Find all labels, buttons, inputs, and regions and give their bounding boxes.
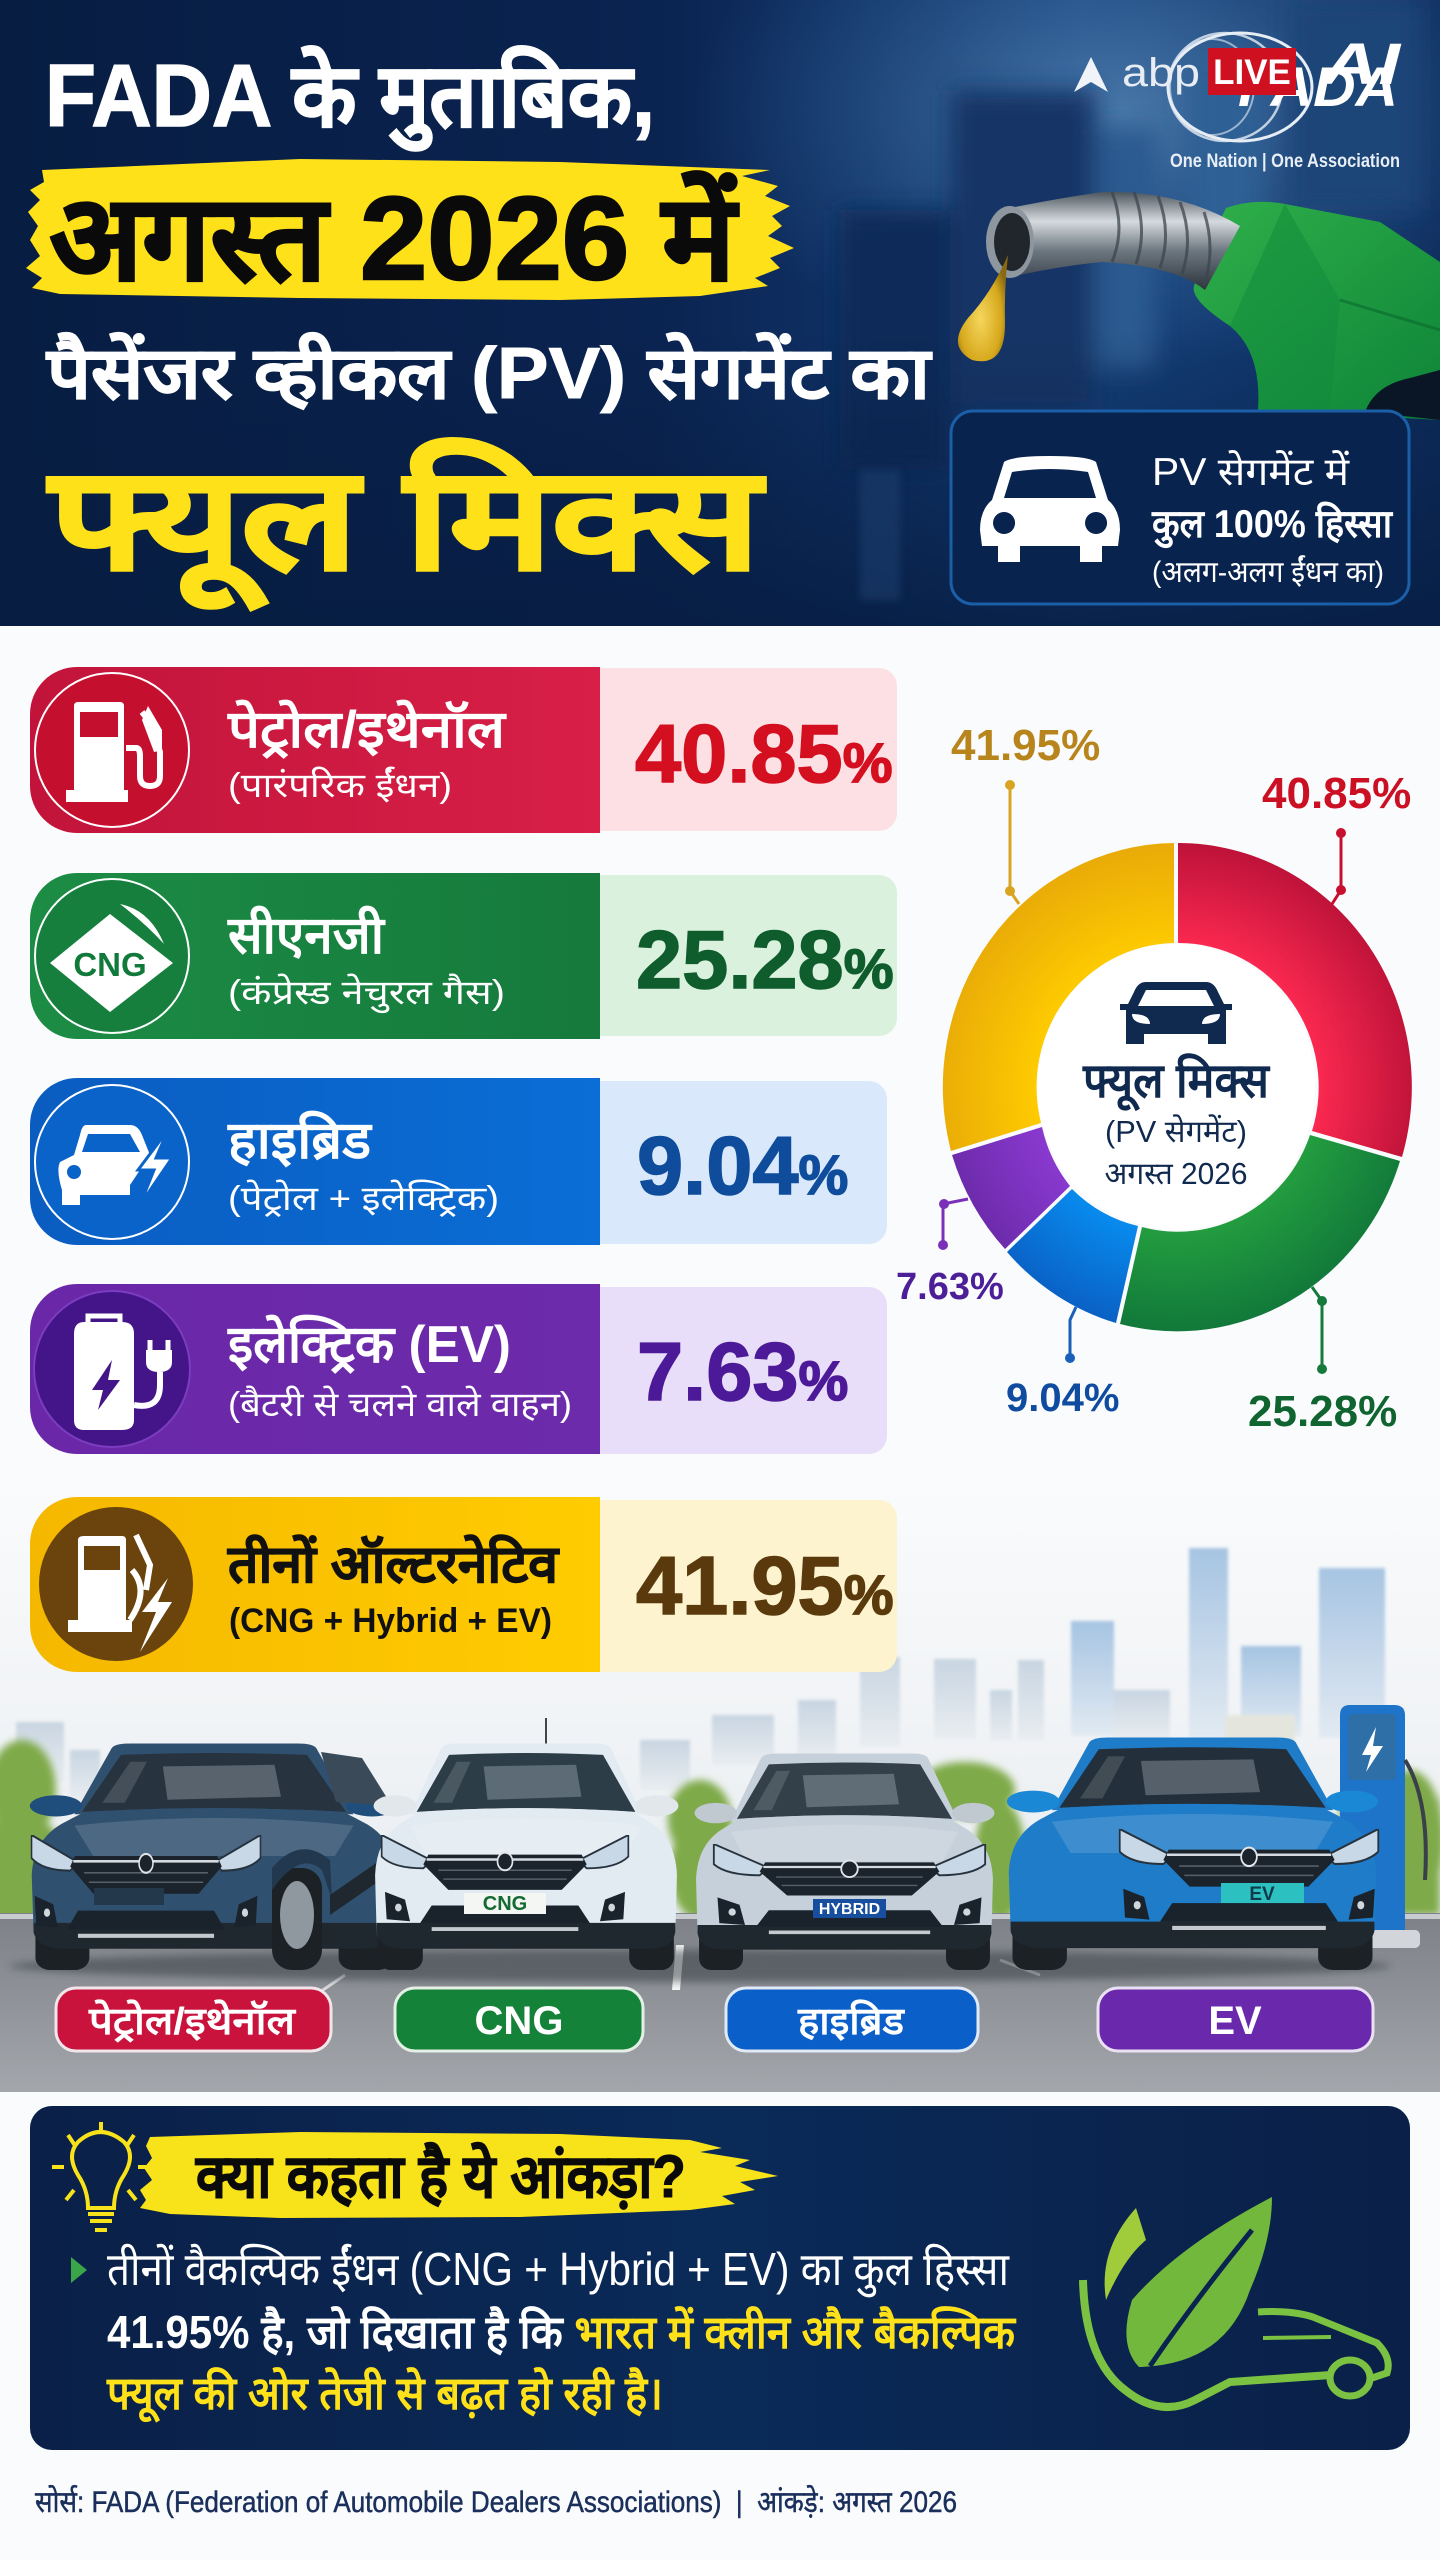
yellow brush highlight (26, 159, 794, 300)
text: petrol plus electric: (पेट्रोल + इलेक्ट्रिक) (228, 1179, 499, 1218)
value: 41.95 percent: 41.95% (636, 1539, 894, 1632)
pill: CNG: CNG (475, 1999, 563, 2043)
header band (0, 0, 1440, 626)
text: PV segment: (PV सेगमेंट) (1105, 1114, 1247, 1149)
heading text: क्या कहता है ये आंकड़ा? (195, 2142, 686, 2210)
icon: light bulb (52, 2122, 150, 2230)
insight line 2: 41.95% है, जो दिखाता है कि भारत में क्लीन और बैकल्पिक (107, 2306, 1017, 2358)
logo: abp LIVE: abp (1122, 51, 1200, 95)
title line: August 2026: अगस्त 2026 में (50, 171, 740, 305)
pill: petrol ethanol (56, 1988, 331, 2051)
logo: abp LIVE: LIVE (1213, 53, 1291, 92)
text: fuel mix: फ्यूल मिक्स (1082, 1053, 1270, 1112)
logo: FADA: FADA (1238, 55, 1398, 118)
label: 9.04 (1006, 1307, 1119, 1420)
text: CNG plate: CNG (483, 1893, 527, 1915)
row: electric (30, 1284, 887, 1454)
source footer: सोर्स: FADA (Federation of Automobile Dealers Associations) | आंकड़े: अगस्त 2026 (35, 2485, 957, 2519)
text: August 2026: अगस्त 2026 (1104, 1156, 1248, 1191)
row: petrol ethanol (30, 667, 897, 833)
label: 40.85 (1262, 769, 1411, 904)
segment: electric (952, 1127, 1070, 1249)
value: 9.04 percent: 9.04% (637, 1119, 848, 1212)
text: battery vehicles: (बैटरी से चलने वाले वाहन) (228, 1385, 572, 1424)
label: 7.63 (896, 1199, 1004, 1308)
donut center: white hub (1037, 944, 1315, 1230)
trees (0, 1740, 1440, 1925)
logo: FADA: One Nation | One Association (1170, 151, 1400, 172)
text: compressed natural gas: (कंप्रेस्ड नेचुरल गैस) (228, 973, 505, 1014)
scene background: sky and skyline (0, 1480, 1440, 1920)
value: 7.63 percent: 7.63% (637, 1325, 848, 1418)
icon: white car (980, 456, 1120, 562)
label: 40.85: 40.85% (1262, 769, 1411, 818)
text: traditional fuel: (पारंपरिक ईंधन) (228, 766, 452, 805)
text: total 100 percent share: कुल 100% हिस्सा (1151, 501, 1394, 549)
pill: EV (1098, 1988, 1373, 2051)
text: hybrid name: हाइब्रिड (227, 1110, 373, 1170)
icon: leaf car (1083, 2197, 1388, 2407)
text: petrol name: पेट्रोल/इथेनॉल (227, 699, 507, 759)
insight line 3: फ्यूल की ओर तेजी से बढ़त हो रही है। (106, 2367, 663, 2423)
label: 9.04: 9.04% (1006, 1376, 1119, 1420)
text: electric name: इलेक्ट्रिक (EV) (227, 1314, 511, 1374)
text: alternatives name: तीनों ऑल्टरनेटिव (227, 1534, 560, 1594)
logo: FADA: AI (1319, 32, 1403, 97)
label: 25.28 (1248, 1287, 1397, 1436)
row: hybrid (30, 1078, 887, 1245)
row: CNG (30, 873, 897, 1039)
text: CNG Hybrid EV: (CNG + Hybrid + EV) (229, 1602, 552, 1640)
icon: EV charger (34, 1291, 190, 1447)
segment: petrol (1178, 843, 1412, 1157)
car: hybrid silver (695, 1753, 994, 1970)
icon: fuel pump (35, 673, 189, 827)
pill: hybrid: हाइब्रिड (797, 1999, 906, 2043)
row: three alternatives (30, 1497, 897, 1672)
value: 40.85 percent: 40.85% (635, 707, 892, 800)
pill: petrol ethanol: पेट्रोल/इथेनॉल (88, 1999, 296, 2043)
EV charging station (1330, 1705, 1426, 1948)
label: 41.95: 41.95% (951, 721, 1100, 770)
car: petrol suv (30, 1744, 398, 1970)
segment: hybrid (1007, 1189, 1138, 1323)
text: EV plate: EV (1249, 1884, 1275, 1905)
icon: CNG diamond: CNG (73, 946, 147, 983)
segment: alternatives (943, 843, 1174, 1151)
logo: FADA (1168, 32, 1403, 172)
car: CNG white (374, 1718, 678, 1970)
title line: passenger vehicle segment: पैसेंजर व्हीकल (PV) सेगमेंट का (45, 332, 933, 414)
text: CNG plate (464, 1893, 546, 1915)
pill: hybrid (726, 1988, 978, 2051)
title line: fuel mix: फ्यूल मिक्स (46, 438, 766, 610)
road (0, 1913, 1440, 2092)
value: 25.28 percent: 25.28% (636, 913, 894, 1006)
panel: PV segment 100% (951, 411, 1409, 604)
fuel nozzle illustration (958, 192, 1440, 420)
label: 41.95 (951, 721, 1100, 904)
icon: alternative fuels (39, 1507, 193, 1661)
icon: hybrid car (35, 1085, 189, 1239)
segment: CNG (1120, 1135, 1400, 1331)
text: HYBRID plate: HYBRID (819, 1901, 880, 1918)
panel: what the figure says (30, 2106, 1410, 2450)
yellow brush heading (140, 2132, 778, 2218)
icon: navy car (1120, 982, 1232, 1044)
insight line 1: तीनों वैकल्पिक ईंधन (CNG + Hybrid + EV) का कुल हिस्सा (107, 2243, 1010, 2298)
text: CNG name: सीएनजी (227, 905, 386, 965)
text: EV plate (1221, 1883, 1304, 1905)
pill: CNG (395, 1988, 643, 2051)
title line: FADA ke mutabik: FADA के मुताबिक, (45, 45, 655, 151)
pill: EV: EV (1208, 1999, 1262, 2043)
donut chart: fuel mix (896, 721, 1412, 1436)
car: EV blue (1007, 1738, 1378, 1970)
logo: abp LIVE (1074, 48, 1296, 95)
text: different fuels: (अलग-अलग ईंधन का) (1152, 555, 1384, 589)
text: PV segment: PV सेगमेंट में (1152, 450, 1350, 494)
icon: bullet arrow (71, 2257, 87, 2283)
label: 25.28: 25.28% (1248, 1387, 1397, 1436)
plate (94, 1888, 164, 1905)
icon: CNG diamond (35, 879, 189, 1033)
label: 7.63: 7.63% (896, 1266, 1004, 1308)
